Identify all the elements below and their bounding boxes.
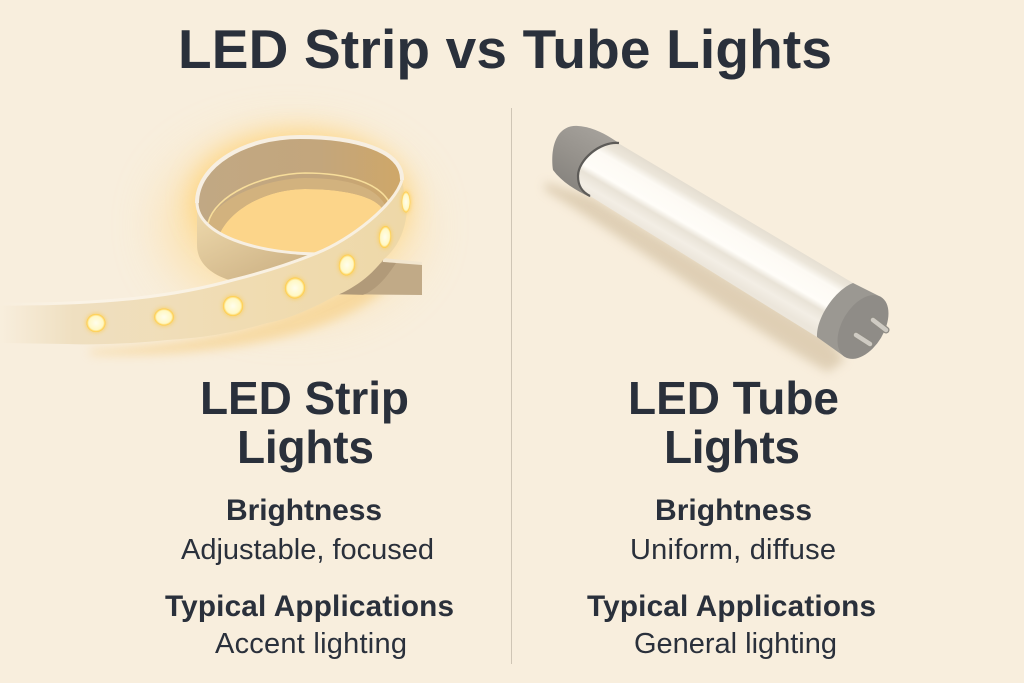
typical applications: Typical Applications <box>587 590 876 623</box>
cap end face <box>827 286 899 368</box>
brightness: Brightness <box>655 494 812 527</box>
typical applications: Accent lighting <box>215 628 407 660</box>
connector pins <box>856 320 886 344</box>
illustration: LED tube light <box>545 126 899 372</box>
brightness: Uniform, diffuse <box>630 534 836 566</box>
cap seam <box>578 143 619 196</box>
loop floor <box>220 189 382 253</box>
loop inner lip <box>208 173 389 233</box>
heading: Lights <box>237 421 374 473</box>
heading <box>200 372 409 473</box>
loop inner wall <box>197 137 402 254</box>
brightness: Brightness <box>226 494 382 527</box>
brightness: Adjustable, focused <box>181 534 434 566</box>
LED dots <box>86 191 410 332</box>
right end cap <box>817 283 899 368</box>
title: LED Strip vs Tube Lights <box>178 18 832 80</box>
left end cap <box>552 126 619 197</box>
strip glow <box>90 132 415 355</box>
typical applications <box>165 590 454 660</box>
column: LED Strip Lights <box>165 372 454 660</box>
typical applications <box>587 590 876 660</box>
strip tail end <box>328 258 422 295</box>
heading: LED Strip <box>200 372 409 424</box>
loop front band <box>197 210 340 281</box>
brightness <box>630 494 836 566</box>
loop rim <box>197 137 402 254</box>
column: LED Tube Lights <box>587 372 876 660</box>
heading: Lights <box>664 421 800 473</box>
tube body <box>579 143 853 337</box>
heading: LED Tube <box>628 372 839 424</box>
typical applications: General lighting <box>634 628 837 660</box>
heading <box>628 372 839 473</box>
strip edge highlight <box>0 180 402 304</box>
main strip band <box>0 180 407 344</box>
tube shadow <box>545 182 845 372</box>
illustration: LED strip light <box>0 132 422 355</box>
typical applications: Typical Applications <box>165 590 454 623</box>
brightness <box>181 494 434 566</box>
center divider <box>511 108 512 664</box>
